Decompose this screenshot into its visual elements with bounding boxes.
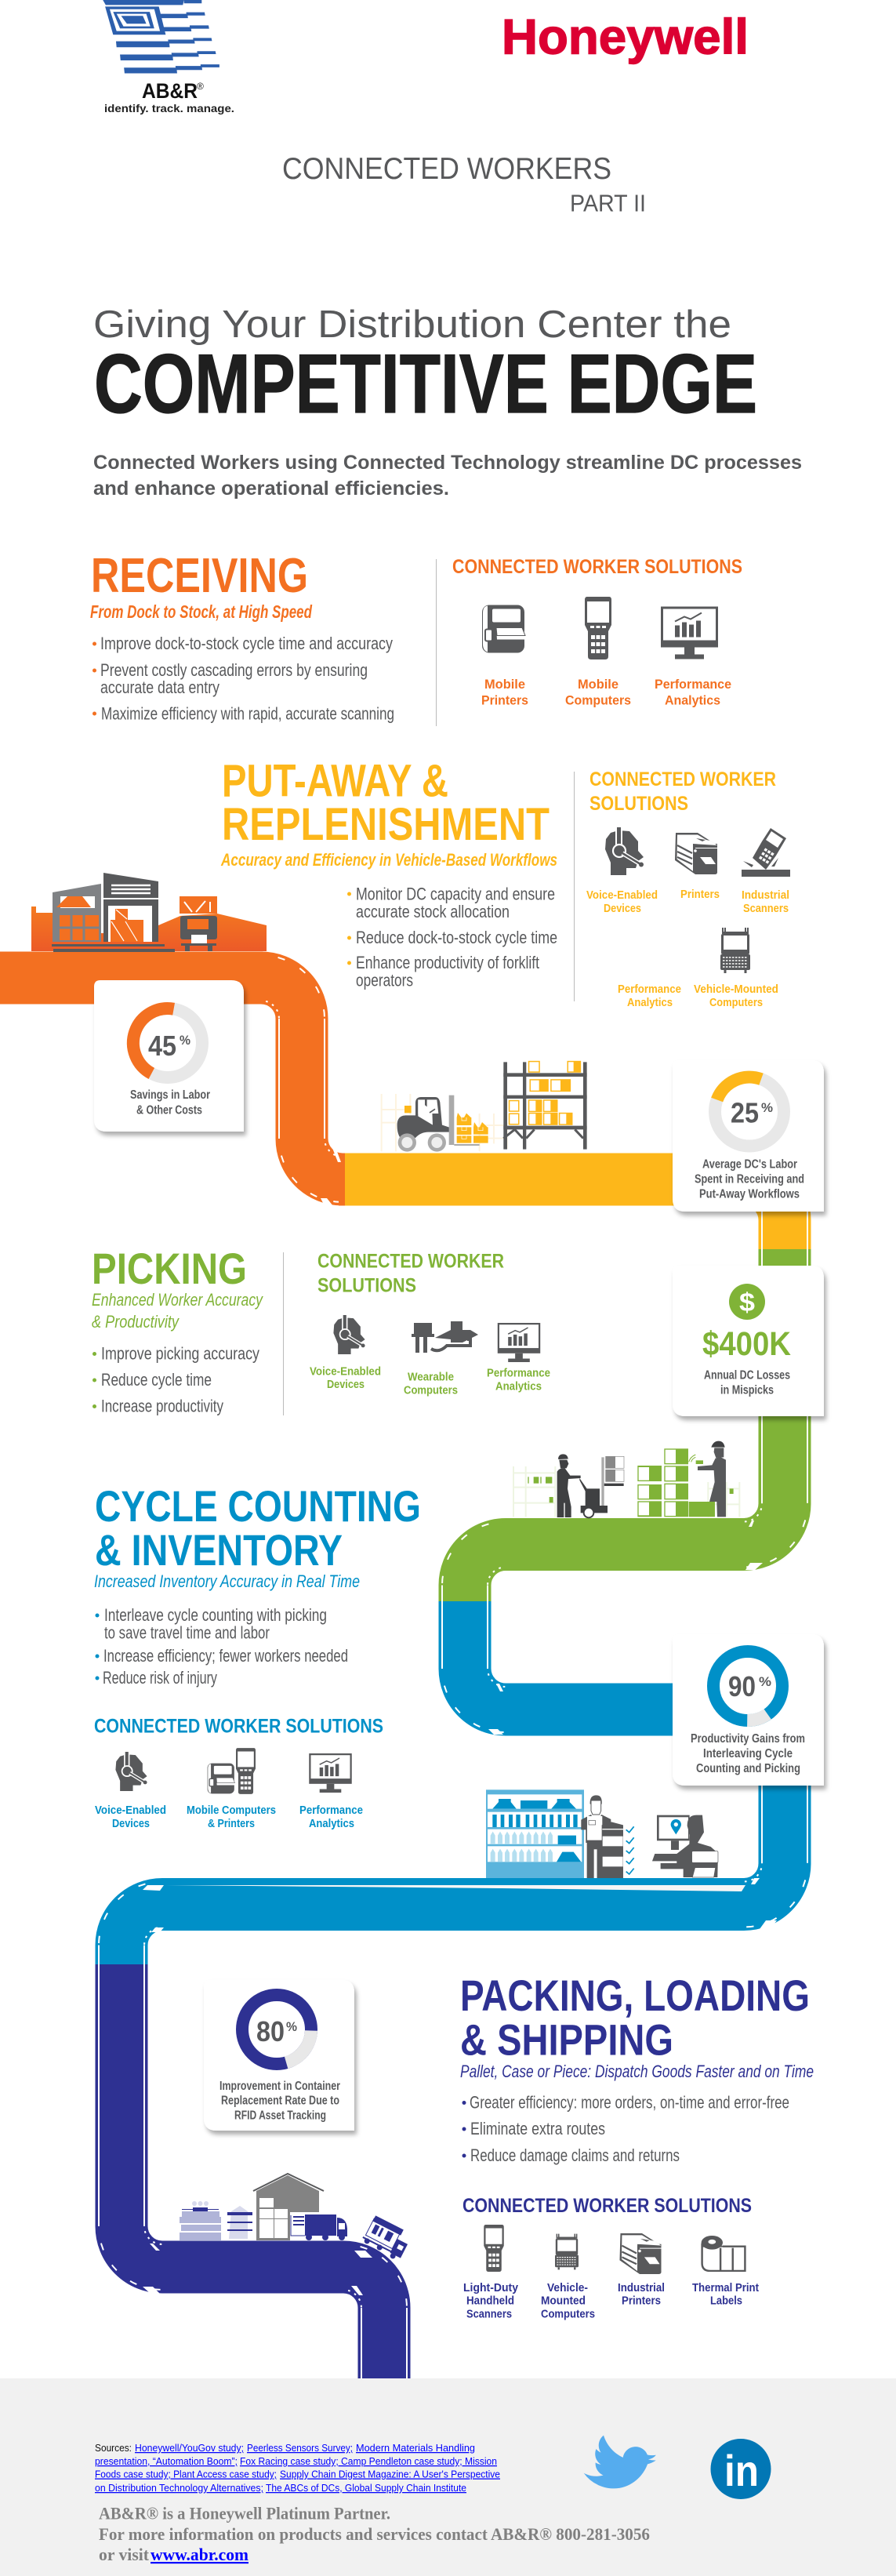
checklist ticks xyxy=(626,1826,634,1874)
sources: on Distribution Technology Alternatives; xyxy=(95,2483,263,2494)
bullet list: Prevent costly cascading errors by ensuring xyxy=(100,660,368,680)
solutions heading: SOLUTIONS xyxy=(589,793,688,815)
solution labels: Performance xyxy=(299,1804,363,1817)
solution labels: Labels xyxy=(710,2294,742,2307)
sources: Sources: xyxy=(95,2443,132,2454)
pale background racks xyxy=(513,1466,739,1517)
registered mark: ® xyxy=(197,81,204,92)
illustration: workers with boxes xyxy=(513,1441,739,1517)
bullet list: Enhance productivity of forklift xyxy=(356,953,539,972)
heading: PICKING xyxy=(92,1244,247,1293)
value: % xyxy=(286,2019,297,2034)
solution labels: Light-Duty xyxy=(463,2281,519,2294)
solution labels: Devices xyxy=(112,1818,150,1830)
icon: vehicle-mounted computer xyxy=(555,2234,579,2269)
value: % xyxy=(761,1100,773,1115)
bullet list: Improve dock-to-stock cycle time and accuracy xyxy=(100,634,393,653)
solution labels: Mobile Computers xyxy=(187,1804,276,1817)
stat card: 45 percent xyxy=(94,980,244,1132)
bullet list: operators xyxy=(356,971,413,990)
solution labels: Handheld xyxy=(466,2294,514,2307)
caption: Put-Away Workflows xyxy=(699,1187,800,1201)
icon: industrial scanner xyxy=(742,828,790,877)
main title: Giving Your Distribution Center the xyxy=(93,303,731,346)
solution labels: Devices xyxy=(604,903,641,915)
bullet list xyxy=(96,1605,348,1688)
series title: PART II xyxy=(570,190,646,216)
logo: AB&R xyxy=(103,0,234,114)
worker with cart xyxy=(557,1454,624,1517)
bullet list: Maximize efficiency with rapid, accurate scanning xyxy=(101,704,394,723)
bullet list: Reduce dock-to-stock cycle time xyxy=(356,928,557,947)
solution labels: Printers xyxy=(622,2294,661,2307)
sources: Peerless Sensors Survey; xyxy=(247,2443,353,2454)
bullet list xyxy=(463,2092,789,2165)
caption xyxy=(691,1732,805,1775)
solution labels: Devices xyxy=(327,1379,365,1391)
solution labels: Computers xyxy=(709,997,763,1009)
sources xyxy=(95,2443,500,2494)
heading: REPLENISHMENT xyxy=(222,799,550,850)
caption: Average DC's Labor xyxy=(702,1157,797,1172)
solution labels: Performance xyxy=(487,1368,550,1380)
value: 45 xyxy=(148,1030,176,1062)
heading: PACKING, LOADING xyxy=(460,1971,810,2020)
solution labels xyxy=(95,1804,363,1830)
caption: Interleaving Cycle xyxy=(703,1747,793,1760)
bullet list: Reduce risk of injury xyxy=(103,1668,217,1688)
caption: & Other Costs xyxy=(136,1104,202,1117)
solution labels: Mobile xyxy=(484,677,525,692)
footer xyxy=(0,2378,896,2576)
caption: Spent in Receiving and xyxy=(695,1173,804,1186)
logo wordmark: AB&R xyxy=(142,79,198,103)
caption xyxy=(695,1157,804,1201)
bullet list: Interleave cycle counting with picking xyxy=(104,1605,327,1625)
solution labels: Thermal Print xyxy=(692,2281,759,2294)
bullet list: Eliminate extra routes xyxy=(470,2119,605,2138)
panel: picking xyxy=(92,1244,550,1416)
icon: printer xyxy=(675,833,717,874)
solution labels: Computers xyxy=(565,693,631,707)
icon: thermal print labels xyxy=(702,2236,745,2271)
solutions heading xyxy=(317,1250,504,1297)
bullet list xyxy=(93,634,394,723)
panel: put-away and replenishment xyxy=(220,756,790,1009)
sources: Foods case study; Plant Access case study; xyxy=(95,2469,277,2480)
heading xyxy=(460,1971,810,2064)
bullet list xyxy=(347,885,557,990)
subheading: Pallet, Case or Piece: Dispatch Goods Faster and on Time xyxy=(460,2062,814,2081)
bullet list: Improve picking accuracy xyxy=(101,1344,259,1363)
partner note: www.abr.com xyxy=(151,2545,248,2564)
caption xyxy=(219,2080,340,2122)
intro text xyxy=(93,452,802,500)
donut chart xyxy=(715,1077,784,1146)
icon: mobile computers and printers xyxy=(208,1748,256,1794)
bullet list: Reduce cycle time xyxy=(101,1370,212,1390)
value: 25 xyxy=(731,1096,759,1129)
icon: voice headset xyxy=(333,1315,365,1354)
donut chart xyxy=(713,1651,782,1720)
subheading: Increased Inventory Accuracy in Real Time xyxy=(94,1571,360,1591)
panel: cycle counting and inventory xyxy=(94,1481,421,1830)
stat card: 80 percent xyxy=(204,1980,354,2131)
sources: Honeywell/YouGov study; xyxy=(135,2443,244,2454)
sources: presentation, “Automation Boom”; xyxy=(95,2456,238,2467)
caption: Replacement Rate Due to xyxy=(221,2094,339,2108)
road: winding path through all workflow stages xyxy=(0,978,785,2378)
heading: & INVENTORY xyxy=(95,1525,343,1575)
shelf xyxy=(486,1789,584,1878)
donut chart xyxy=(133,1008,202,1077)
icon: twitter xyxy=(582,2432,658,2502)
caption: in Mispicks xyxy=(720,1383,774,1397)
icon: linkedin: in xyxy=(724,2446,759,2495)
illustration: storage rack xyxy=(503,1061,587,1150)
value: % xyxy=(759,1674,771,1689)
stat card: 90 percent xyxy=(673,1634,824,1786)
solutions heading: CONNECTED WORKER xyxy=(589,768,776,790)
value: $400K xyxy=(702,1325,791,1363)
delivery truck xyxy=(290,2212,347,2240)
solution labels xyxy=(586,888,789,1009)
sources: Supply Chain Digest Magazine: A User's Perspective xyxy=(280,2469,500,2480)
illustration: inventory shelf and workers xyxy=(486,1789,718,1878)
bullet list: accurate data entry xyxy=(100,678,219,697)
series title: CONNECTED WORKERS xyxy=(282,152,611,186)
bullet list: Increase productivity xyxy=(101,1396,223,1416)
caption: RFID Asset Tracking xyxy=(234,2109,326,2122)
solution labels: Mounted xyxy=(541,2294,586,2307)
bullet list: to save travel time and labor xyxy=(104,1623,270,1642)
icon: performance analytics xyxy=(309,1753,352,1793)
subheading: & Productivity xyxy=(92,1312,180,1332)
solution labels: & Printers xyxy=(208,1818,255,1830)
icon: dollar coin xyxy=(729,1284,765,1320)
solution labels: Analytics xyxy=(309,1818,354,1830)
heading xyxy=(95,1481,421,1575)
solution labels: Analytics xyxy=(665,693,720,707)
solutions heading: CONNECTED WORKER xyxy=(317,1250,504,1272)
partner note xyxy=(99,2503,650,2564)
partner note: or visit xyxy=(99,2545,150,2564)
bullet list: Increase efficiency; fewer workers needed xyxy=(103,1646,348,1666)
icon: voice headset xyxy=(605,827,644,875)
icon: mobile printer xyxy=(482,605,528,652)
donut chart xyxy=(242,1995,311,2064)
series title xyxy=(282,152,646,216)
solutions heading: SOLUTIONS xyxy=(317,1275,416,1297)
illustration: forklift xyxy=(382,1094,507,1152)
icon: linkedin xyxy=(710,2439,771,2499)
solution labels: Performance xyxy=(655,677,731,692)
icon: performance analytics xyxy=(498,1323,540,1362)
panel: receiving xyxy=(90,549,742,726)
icon: light-duty handheld scanner xyxy=(484,2225,504,2272)
worker at computer xyxy=(652,1815,718,1877)
sources: Fox Racing case study; Camp Pendleton case study; Mission xyxy=(240,2456,497,2467)
solution labels xyxy=(310,1366,550,1397)
solution labels: Wearable xyxy=(408,1371,454,1383)
solution labels: Voice-Enabled xyxy=(95,1804,166,1817)
solutions heading: CONNECTED WORKER SOLUTIONS xyxy=(94,1716,383,1738)
caption: Productivity Gains from xyxy=(691,1732,805,1746)
icon: voice headset xyxy=(115,1752,147,1791)
bullet list: Greater efficiency: more orders, on-time and error-free xyxy=(470,2092,789,2113)
stat card: 400K xyxy=(673,1266,824,1416)
solution labels: Vehicle-Mounted xyxy=(694,983,778,996)
sources: The ABCs of DCs, Global Supply Chain Institute xyxy=(266,2483,466,2494)
solution labels: Vehicle- xyxy=(547,2281,588,2294)
partner note: AB&R® is a Honeywell Platinum Partner. xyxy=(99,2503,390,2523)
caption xyxy=(704,1369,790,1397)
icon: performance analytics xyxy=(661,607,718,659)
worker with scanner xyxy=(698,1441,726,1517)
value: % xyxy=(180,1033,190,1048)
bullet list: accurate stock allocation xyxy=(356,902,510,921)
tilted truck xyxy=(360,2214,412,2262)
value: 90 xyxy=(728,1670,756,1702)
bullet list xyxy=(93,1344,259,1416)
solution labels xyxy=(463,2281,759,2321)
bullet list: Reduce damage claims and returns xyxy=(470,2145,680,2165)
panel: packing, loading and shipping xyxy=(460,1971,814,2321)
subheading: From Dock to Stock, at High Speed xyxy=(90,601,313,622)
value: 80 xyxy=(256,2015,285,2047)
logo: Honeywell: Honeywell xyxy=(502,9,749,64)
solution labels: Industrial xyxy=(742,889,789,902)
heading: RECEIVING xyxy=(91,549,308,603)
stat card: 25 percent xyxy=(673,1060,824,1212)
intro text: and enhance operational efficiencies. xyxy=(93,478,449,500)
solution labels: Printers xyxy=(680,888,720,901)
solutions heading: CONNECTED WORKER SOLUTIONS xyxy=(463,2195,752,2217)
icon: dollar coin: $ xyxy=(739,1288,755,1317)
solution labels: Printers xyxy=(481,693,528,707)
caption xyxy=(130,1088,210,1117)
subheading xyxy=(92,1290,264,1332)
icon: industrial printer xyxy=(619,2233,661,2274)
bullet list: Monitor DC capacity and ensure xyxy=(356,885,555,903)
solution labels: Computers xyxy=(541,2307,595,2321)
solution labels: Scanners xyxy=(466,2307,512,2321)
solution labels: Mobile xyxy=(578,677,618,692)
caption: Savings in Labor xyxy=(130,1088,210,1102)
heading: PUT-AWAY & xyxy=(222,756,448,806)
green box stack xyxy=(637,1448,715,1517)
illustration: warehouse and truck xyxy=(31,873,267,952)
subheading: Accuracy and Efficiency in Vehicle-Based Workflows xyxy=(220,850,557,870)
solution labels: Analytics xyxy=(627,997,673,1009)
heading: & SHIPPING xyxy=(460,2015,673,2064)
partner note: For more information on products and services contact AB&R® 800-281-3056 xyxy=(99,2524,650,2544)
solution labels: Voice-Enabled xyxy=(586,889,658,902)
logo tagline: identify. track. manage. xyxy=(104,102,234,114)
worker with boxes xyxy=(581,1795,623,1878)
intro text: Connected Workers using Connected Technology streamline DC processes xyxy=(93,452,802,474)
solution labels xyxy=(481,677,731,707)
warehouse xyxy=(253,2174,324,2240)
tanks xyxy=(180,2201,252,2240)
main title xyxy=(93,303,757,431)
heading xyxy=(222,756,550,850)
caption: Counting and Picking xyxy=(696,1762,800,1775)
icon: wearable computer xyxy=(412,1321,478,1353)
solutions heading: CONNECTED WORKER SOLUTIONS xyxy=(452,556,742,578)
icon: mobile computer xyxy=(585,597,611,659)
heading: CYCLE COUNTING xyxy=(95,1481,421,1531)
icon: vehicle-mounted computer xyxy=(720,928,750,973)
solution labels: Performance xyxy=(618,983,681,996)
caption: Annual DC Losses xyxy=(704,1369,790,1382)
caption: Improvement in Container xyxy=(219,2080,340,2093)
solutions heading xyxy=(589,768,776,815)
solution labels: Voice-Enabled xyxy=(310,1366,381,1379)
solution labels: Analytics xyxy=(495,1380,542,1393)
subheading: Enhanced Worker Accuracy xyxy=(92,1290,264,1310)
illustration: warehouse, trucks and tanks xyxy=(180,2174,412,2262)
solution labels: Scanners xyxy=(743,903,789,915)
solution labels: Computers xyxy=(404,1385,458,1397)
solution labels: Industrial xyxy=(618,2281,665,2294)
sources: Modern Materials Handling xyxy=(356,2443,475,2454)
